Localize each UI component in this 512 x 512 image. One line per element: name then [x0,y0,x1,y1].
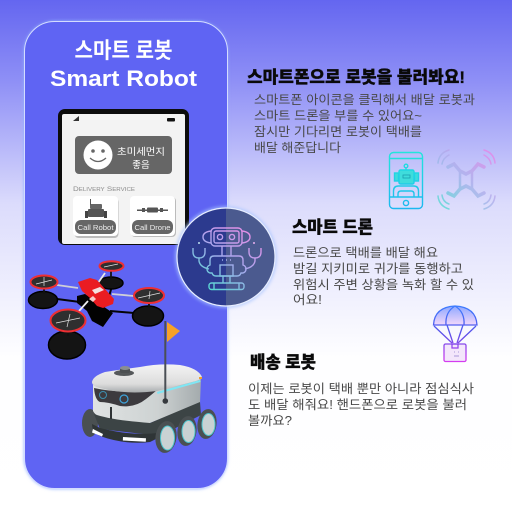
text block: delivery robot description [248,382,475,428]
illustration: red drone [28,261,164,359]
text block: delivery robot description: 도 배달 해줘요! 핸드폰으로 로봇을 불러 [248,397,467,412]
text block: drone description: 어요! [293,293,322,307]
visor [94,388,157,406]
title [50,38,198,91]
text block: drone description: 밤길 지키미로 귀가를 동행하고 [293,261,463,276]
text block: drone description: 위험시 주변 상황을 녹화 할 수 있 [293,278,474,292]
center robot badge [175,206,277,308]
text block: delivery robot description: 이제는 로봇이 택배 뿐만 아니라 점심식사 [248,382,475,396]
heading: call by smartphone: 스마트폰으로 로봇을 불러봐요! [247,68,465,87]
call robot button: Call Robot [78,223,114,232]
drone arms [44,270,149,336]
rear wheel [82,409,98,437]
wheels [153,408,218,454]
rotors [30,261,164,332]
signal icon [73,116,79,121]
text block: smartphone description: 스마트폰 아이콘을 클릭해서 배달 로봇과 [254,93,476,107]
flag [162,321,180,404]
text block: delivery robot description: 볼까요? [248,414,292,428]
battery icon [167,118,175,122]
title: Smart Robot [50,66,198,91]
delivery service label: Delivery Service [73,186,136,193]
text block: drone description [293,246,474,307]
air quality card: 초미세먼지 [117,147,165,158]
air quality card: 좋음 [132,160,150,171]
top shell [92,364,202,392]
rotor shadows [28,277,164,359]
panel: left robot card [24,21,228,489]
headlights [92,429,103,436]
light strip [157,380,200,394]
text block: smartphone description: 배달 해준답니다 [254,141,342,155]
heading: delivery robot: 배송 로봇 [250,353,316,372]
orange marker [199,377,202,379]
icon: parachute [434,306,477,362]
dark band [94,402,201,436]
red body [78,278,114,308]
icon: robot [193,228,261,290]
body silver [93,378,201,423]
heading: smart drone: 스마트 드론 [292,218,373,237]
text block: smartphone description: 스마트 드론을 부를 수 있어요~ [254,109,422,123]
drone shadow frame [57,286,134,335]
text block: drone description: 드론으로 택배를 배달 해요 [293,246,438,260]
call drone button: Call Drone [134,223,170,232]
icon: drone [438,150,495,209]
illustration: delivery robot [82,321,218,454]
text block: smartphone description: 잠시만 기다리면 로봇이 택배를 [254,125,422,139]
bottom tray [92,424,160,443]
lidar dome [114,370,134,376]
title: 스마트 로봇 [74,38,172,63]
phone mockup [58,109,189,245]
text block: smartphone description [254,93,476,155]
icon: phone with robot [390,152,422,208]
air quality card [75,136,172,174]
